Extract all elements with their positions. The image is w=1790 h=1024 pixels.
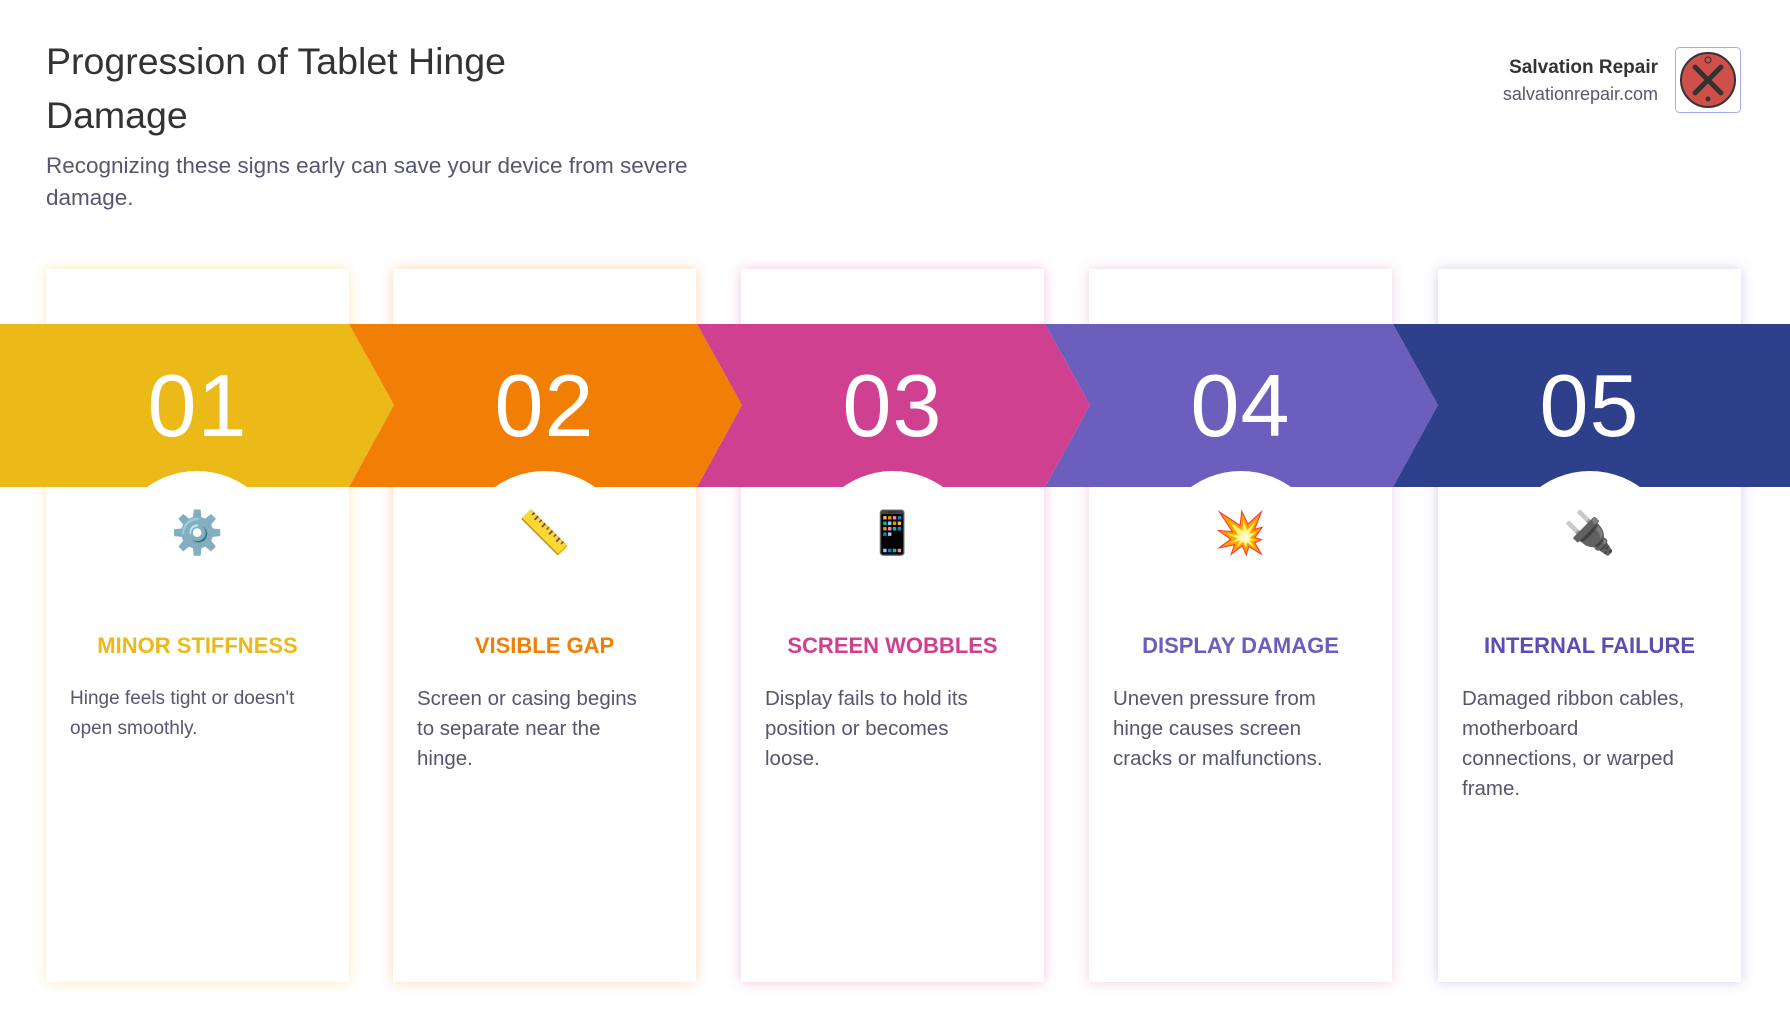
description: Display fails to hold its position or becomes loose. xyxy=(765,687,968,770)
step 3 xyxy=(765,356,998,770)
icon: plug: 🔌 xyxy=(1563,509,1616,556)
step 1 xyxy=(70,356,298,739)
description: Hinge feels tight or doesn't open smoothly. xyxy=(70,688,294,739)
icon: collision: 💥 xyxy=(1214,509,1267,556)
heading: DISPLAY DAMAGE xyxy=(1142,633,1339,658)
step 4: 04 xyxy=(1191,356,1290,455)
description: Uneven pressure from hinge causes screen cracks or malfunctions. xyxy=(1113,687,1323,770)
brand name: Salvation Repair xyxy=(1509,57,1658,78)
step 4 xyxy=(1113,356,1339,770)
icon: gear: ⚙️ xyxy=(171,509,224,556)
subtitle: Recognizing these signs early can save your device from severe damage. xyxy=(46,153,688,210)
brand url: salvationrepair.com xyxy=(1503,84,1658,104)
icon: ruler: 📏 xyxy=(518,509,571,556)
step 2 xyxy=(417,356,637,770)
step 3: 03 xyxy=(843,356,942,455)
description: Damaged ribbon cables, motherboard connections, or warped frame. xyxy=(1462,687,1684,800)
heading: INTERNAL FAILURE xyxy=(1484,633,1695,658)
description: Screen or casing begins to separate near the hinge. xyxy=(417,687,637,770)
title: Progression of Tablet Hinge Damage xyxy=(46,40,506,136)
step 2: 02 xyxy=(495,356,594,455)
heading: SCREEN WOBBLES xyxy=(787,633,998,658)
icon: phone: 📱 xyxy=(866,509,919,556)
brand block xyxy=(1503,47,1741,113)
step 5 xyxy=(1462,356,1695,800)
step 5: 05 xyxy=(1540,356,1639,455)
icon: logo xyxy=(1675,47,1741,113)
heading: VISIBLE GAP xyxy=(475,633,614,658)
step 1: 01 xyxy=(148,356,247,455)
cards xyxy=(46,269,349,982)
heading: MINOR STIFFNESS xyxy=(97,633,298,658)
